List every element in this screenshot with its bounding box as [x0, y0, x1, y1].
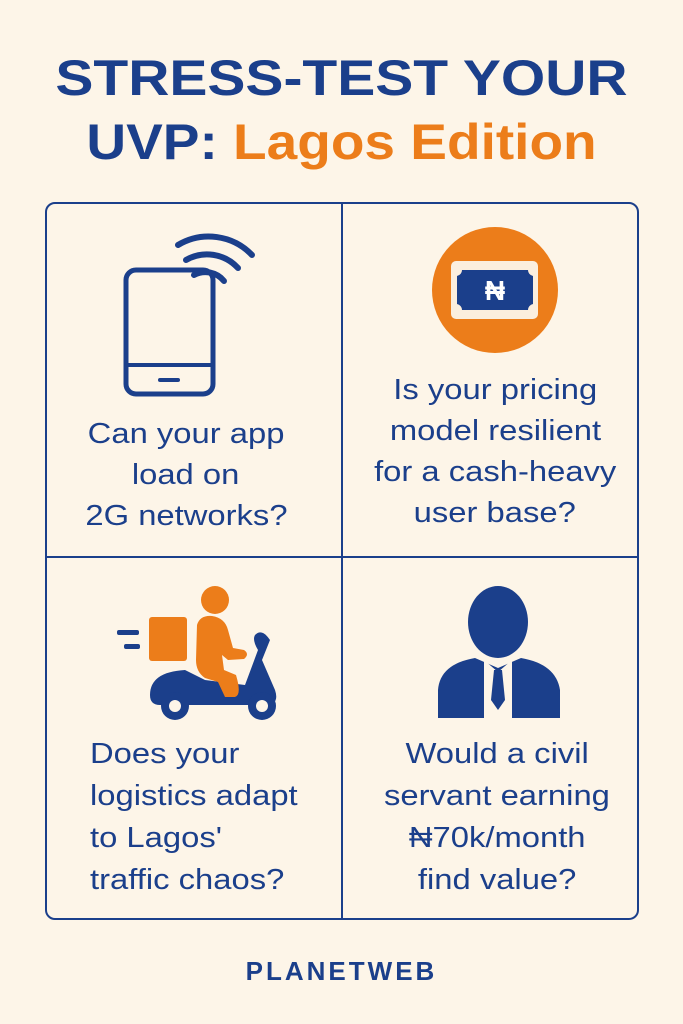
panel grid	[45, 202, 639, 920]
text: cell 3: to Lagos'	[90, 822, 222, 854]
text: cell 2: Is your pricing	[393, 374, 597, 406]
text: cell 3	[90, 738, 298, 896]
text: cell 1	[85, 418, 287, 532]
text: cell 2: for a cash-heavy	[374, 456, 616, 488]
footer brand: PLANETWEB	[246, 956, 437, 986]
text: cell 3: Does your	[90, 738, 239, 770]
text: cell 4: find value?	[418, 864, 576, 896]
title: STRESS-TEST YOUR	[55, 50, 628, 106]
text: cell 2: model resilient	[389, 415, 601, 447]
text: cell 1: 2G networks?	[85, 500, 287, 532]
icon: naira note: ₦	[485, 275, 505, 306]
text: cell 4: Would a civil	[405, 738, 589, 770]
text: cell 3: logistics adapt	[90, 780, 298, 812]
text: cell 1: load on	[132, 459, 240, 491]
text: cell 3: traffic chaos?	[90, 864, 284, 896]
icon: phone with wifi	[124, 234, 255, 396]
icon: naira note	[432, 227, 558, 353]
title	[55, 50, 628, 170]
icon: delivery scooter	[117, 586, 276, 720]
text: cell 1: Can your app	[88, 418, 284, 450]
text: cell 2	[374, 374, 616, 529]
text: cell 4	[384, 738, 610, 896]
text: cell 4: servant earning	[384, 780, 610, 812]
text: cell 4: ₦70k/month	[409, 822, 585, 854]
title: UVP: Lagos Edition	[86, 114, 597, 170]
text: cell 2: user base?	[414, 497, 576, 529]
icon: civil servant	[438, 586, 560, 718]
